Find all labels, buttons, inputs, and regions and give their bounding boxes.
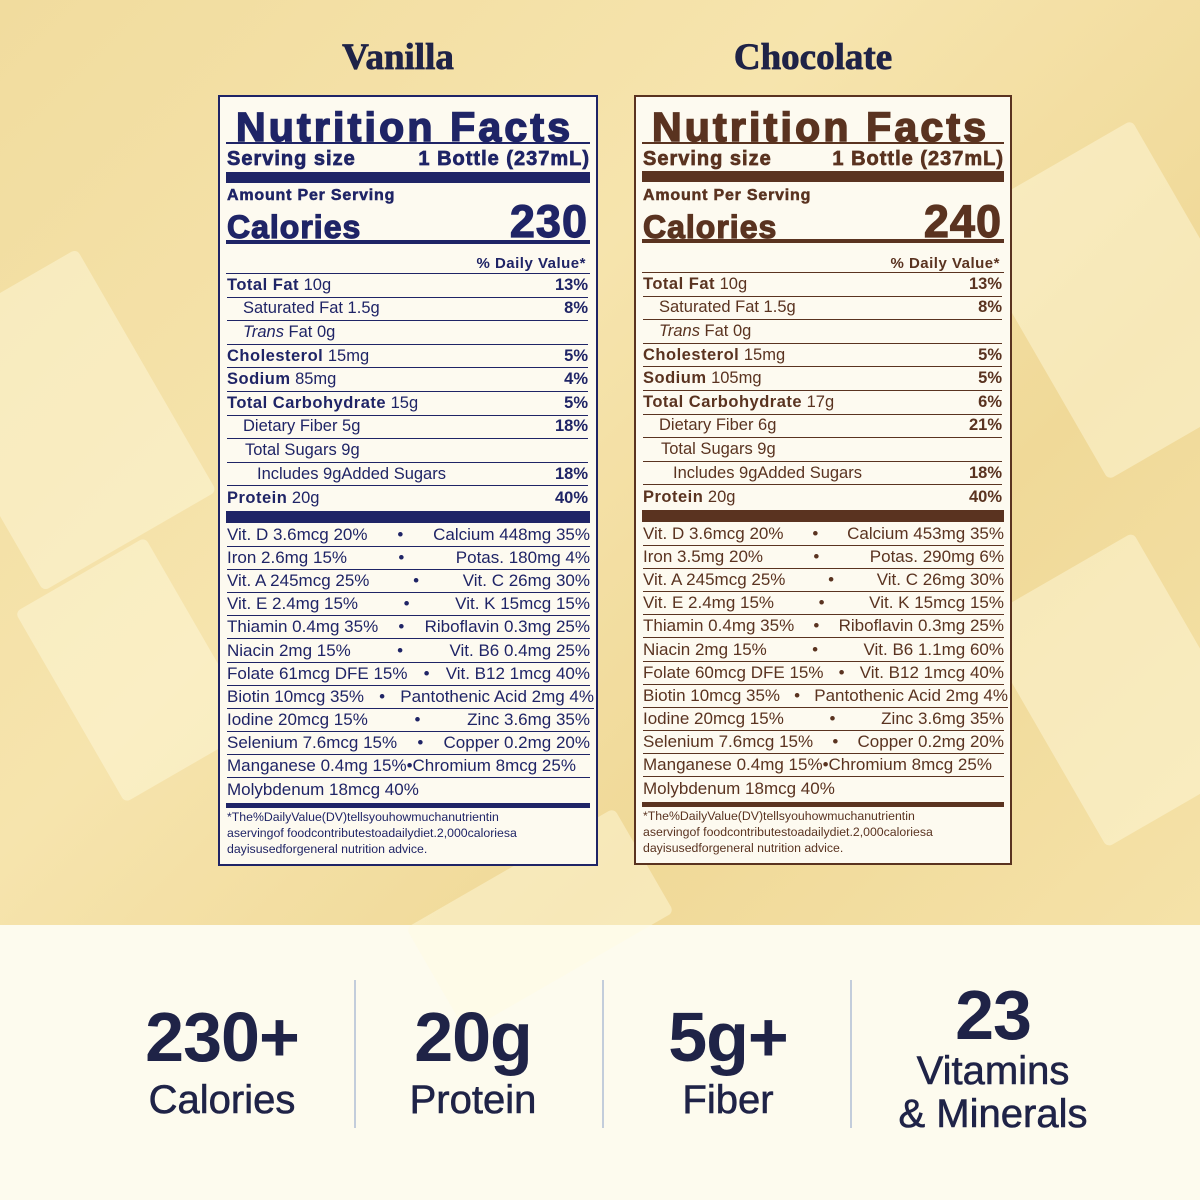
panel: chocolate nutrition facts: • [812,524,818,543]
panel: vanilla nutrition facts: • [404,594,410,613]
panel: vanilla nutrition facts: 1 Bottle (237mL) [418,148,590,170]
panel: vanilla nutrition facts: • [415,710,420,729]
panel: chocolate nutrition facts: Selenium 7.6mcg 15% [643,732,813,751]
panel: vanilla nutrition facts: Nutrition Facts [236,104,573,150]
panel: chocolate nutrition facts: Thiamin 0.4mg 35% [643,616,794,635]
panel: chocolate nutrition facts: 5% [978,369,1002,387]
heading: Chocolate: Chocolate [734,37,892,78]
panel: vanilla nutrition facts: • [397,525,403,544]
stat: fiber: Fiber [682,1078,774,1122]
panel: chocolate nutrition facts: • [819,593,825,612]
panel: chocolate nutrition facts: Riboflavin 0.3mg 25% [839,616,1004,635]
panel: chocolate nutrition facts: 5% [978,346,1002,364]
panel: vanilla nutrition facts: Potas. 180mg 4% [456,548,590,567]
panel: vanilla nutrition facts: Cholesterol 15mg [227,347,369,365]
panel: chocolate nutrition facts: Protein 20g [643,488,735,506]
panel: chocolate nutrition facts: Calories [643,209,777,245]
panel: chocolate nutrition facts: 240 [924,196,1002,247]
panel: vanilla nutrition facts: • [424,664,430,683]
panel: chocolate nutrition facts [634,95,1012,865]
panel: vanilla nutrition facts: *The%DailyValue(DV)tellsyouhowmuchanutrientin [227,810,499,824]
panel: vanilla nutrition facts: Vit. B12 1mcg 40% [446,664,590,683]
panel: chocolate nutrition facts: Includes 9gAdded Sugars [673,464,862,482]
panel: vanilla nutrition facts: Vit. B6 0.4mg 25% [449,641,590,660]
panel: vanilla nutrition facts: Riboflavin 0.3mg 25% [425,617,590,636]
panel: chocolate nutrition facts: Total Fat 10g [643,275,747,293]
panel: chocolate nutrition facts: Nutrition Facts [652,104,989,150]
panel: vanilla nutrition facts: dayisusedforgeneral nutrition advice. [227,842,427,856]
panel: chocolate nutrition facts: dayisusedforgeneral nutrition advice. [643,841,843,855]
panel: chocolate nutrition facts: Total Carbohydrate 17g [643,393,834,411]
panel: vanilla nutrition facts: Amount Per Serving [227,187,395,204]
panel: chocolate nutrition facts: Saturated Fat 1.5g [659,298,796,316]
panel: vanilla nutrition facts: • [379,687,385,706]
panel: vanilla nutrition facts: Total Fat 10g [227,276,331,294]
panel: chocolate nutrition facts: aservingof foodcontributestoadailydiet.2,000caloriesa [643,825,933,839]
panel: vanilla nutrition facts: Manganese 0.4mg 15%•Chromium 8mcg 25% [227,756,576,775]
panel: chocolate nutrition facts: 8% [978,298,1002,316]
panel: vanilla nutrition facts: 8% [564,299,588,317]
panel: vanilla nutrition facts: Thiamin 0.4mg 35% [227,617,378,636]
panel: vanilla nutrition facts: Iodine 20mcg 15% [227,710,368,729]
panel: chocolate nutrition facts: *The%DailyValue(DV)tellsyouhowmuchanutrientin [643,809,915,823]
panel: vanilla nutrition facts: Zinc 3.6mg 35% [467,710,590,729]
panel: vanilla nutrition facts [218,95,598,866]
panel: vanilla nutrition facts: Saturated Fat 1.5g [243,299,380,317]
panel: chocolate nutrition facts: Vit. C 26mg 30% [877,570,1004,589]
panel: vanilla nutrition facts: Protein 20g [227,489,319,507]
panel: vanilla nutrition facts: Includes 9gAdded Sugars [257,465,446,483]
panel: chocolate nutrition facts: • [828,570,834,589]
stat: vitamins: Vitamins [917,1049,1069,1093]
panel: vanilla nutrition facts: 4% [564,370,588,388]
panel: vanilla nutrition facts: aservingof foodcontributestoadailydiet.2,000caloriesa [227,826,517,840]
panel: vanilla nutrition facts: 18% [555,465,588,483]
panel: chocolate nutrition facts: • [813,616,819,635]
panel: chocolate nutrition facts: Trans Fat 0g [659,322,751,340]
panel: vanilla nutrition facts: Total Carbohydrate 15g [227,394,418,412]
panel: chocolate nutrition facts: • [830,709,835,728]
panel: vanilla nutrition facts: • [398,548,404,567]
panel: chocolate nutrition facts: 6% [978,393,1002,411]
panel: chocolate nutrition facts: Iron 3.5mg 20% [643,547,763,566]
stat: protein: 20g [414,998,532,1076]
stat: vitamins: & Minerals [899,1092,1087,1136]
panel: chocolate nutrition facts: Copper 0.2mg 20% [858,732,1004,751]
panel: vanilla nutrition facts: Niacin 2mg 15% [227,641,351,660]
panel: vanilla nutrition facts: Total Sugars 9g [245,441,360,459]
panel: chocolate nutrition facts: Cholesterol 15mg [643,346,785,364]
panel: vanilla nutrition facts: 13% [555,276,588,294]
panel: chocolate nutrition facts: • [813,547,819,566]
panel: chocolate nutrition facts: Potas. 290mg 6% [870,547,1004,566]
panel: chocolate nutrition facts: 21% [969,416,1002,434]
panel: chocolate nutrition facts: Manganese 0.4mg 15%•Chromium 8mcg 25% [643,755,992,774]
panel: vanilla nutrition facts: % Daily Value* [476,255,586,272]
panel: chocolate nutrition facts: Iodine 20mcg 15% [643,709,784,728]
panel: chocolate nutrition facts: Vit. E 2.4mg 15% [643,593,774,612]
panel: vanilla nutrition facts: Iron 2.6mg 15% [227,548,347,567]
panel: vanilla nutrition facts: Vit. A 245mcg 25% [227,571,369,590]
panel: chocolate nutrition facts: • [839,663,845,682]
panel: vanilla nutrition facts: Serving size [227,148,356,170]
panel: chocolate nutrition facts: Zinc 3.6mg 35% [881,709,1004,728]
panel: chocolate nutrition facts: • [794,686,800,705]
panel: chocolate nutrition facts: Vit. A 245mcg 25% [643,570,785,589]
panel: chocolate nutrition facts: Serving size [643,148,772,170]
panel: vanilla nutrition facts: Calcium 448mg 35% [433,525,590,544]
panel: chocolate nutrition facts: Dietary Fiber 6g [659,416,776,434]
panel: chocolate nutrition facts: Vit. K 15mcg 15% [869,593,1004,612]
stat: fiber: 5g+ [668,998,788,1076]
panel: chocolate nutrition facts: • [832,732,838,751]
panel: chocolate nutrition facts: Sodium 105mg [643,369,762,387]
panel: vanilla nutrition facts: 5% [564,347,588,365]
panel: vanilla nutrition facts: Vit. C 26mg 30% [463,571,590,590]
panel: chocolate nutrition facts: 1 Bottle (237mL) [832,148,1004,170]
panel: chocolate nutrition facts: Pantothenic Acid 2mg 4% [814,686,1008,705]
panel: chocolate nutrition facts: Calcium 453mg 35% [847,524,1004,543]
stat: protein [410,998,536,1122]
panel: chocolate nutrition facts: Amount Per Serving [643,187,811,204]
panel: vanilla nutrition facts: Selenium 7.6mcg 15% [227,733,397,752]
panel: vanilla nutrition facts: Copper 0.2mg 20% [444,733,590,752]
panel: vanilla nutrition facts: • [397,641,403,660]
panel: chocolate nutrition facts: Vit. B12 1mcg 40% [860,663,1004,682]
stat: calories [145,998,299,1122]
panel: chocolate nutrition facts: 40% [969,488,1002,506]
panel: vanilla nutrition facts: 5% [564,394,588,412]
panel: vanilla nutrition facts: Vit. E 2.4mg 15% [227,594,358,613]
panel: chocolate nutrition facts: 18% [969,464,1002,482]
panel: vanilla nutrition facts: • [413,571,419,590]
panel: chocolate nutrition facts: Molybdenum 18mcg 40% [643,779,835,798]
panel: vanilla nutrition facts: Biotin 10mcg 35% [227,687,364,706]
panel: vanilla nutrition facts: Dietary Fiber 5g [243,417,360,435]
panel: vanilla nutrition facts: Sodium 85mg [227,370,336,388]
panel: vanilla nutrition facts: 18% [555,417,588,435]
panel: vanilla nutrition facts: • [417,733,423,752]
panel: chocolate nutrition facts: 13% [969,275,1002,293]
panel: vanilla nutrition facts: Vit. K 15mcg 15% [455,594,590,613]
stat: vitamins: 23 [955,976,1031,1054]
panel: chocolate nutrition facts: % Daily Value* [890,255,1000,272]
panel: vanilla nutrition facts: Folate 61mcg DFE 15% [227,664,407,683]
panel: vanilla nutrition facts: Vit. D 3.6mcg 20% [227,525,367,544]
panel: chocolate nutrition facts: Biotin 10mcg 35% [643,686,780,705]
panel: chocolate nutrition facts: Total Sugars 9g [661,440,776,458]
panel: chocolate nutrition facts: Folate 60mcg DFE 15% [643,663,823,682]
heading: Vanilla: Vanilla [342,37,454,78]
panel: vanilla nutrition facts: • [398,617,404,636]
panel: chocolate nutrition facts: Vit. B6 1.1mg 60% [863,640,1004,659]
panel: vanilla nutrition facts: Pantothenic Acid 2mg 4% [400,687,594,706]
panel: vanilla nutrition facts: 230 [510,196,588,247]
panel: vanilla nutrition facts: Calories [227,209,361,245]
panel: vanilla nutrition facts: Trans Fat 0g [243,323,335,341]
stat: calories: Calories [149,1078,295,1122]
stat: calories: 230+ [145,998,299,1076]
panel: vanilla nutrition facts: Molybdenum 18mcg 40% [227,780,419,799]
panel: chocolate nutrition facts: • [812,640,818,659]
panel: chocolate nutrition facts: Vit. D 3.6mcg 20% [643,524,783,543]
stat: vitamins [899,976,1087,1136]
panel: vanilla nutrition facts: 40% [555,489,588,507]
stat: fiber [668,998,788,1122]
stat: protein: Protein [410,1078,536,1122]
panel: chocolate nutrition facts: Niacin 2mg 15% [643,640,767,659]
